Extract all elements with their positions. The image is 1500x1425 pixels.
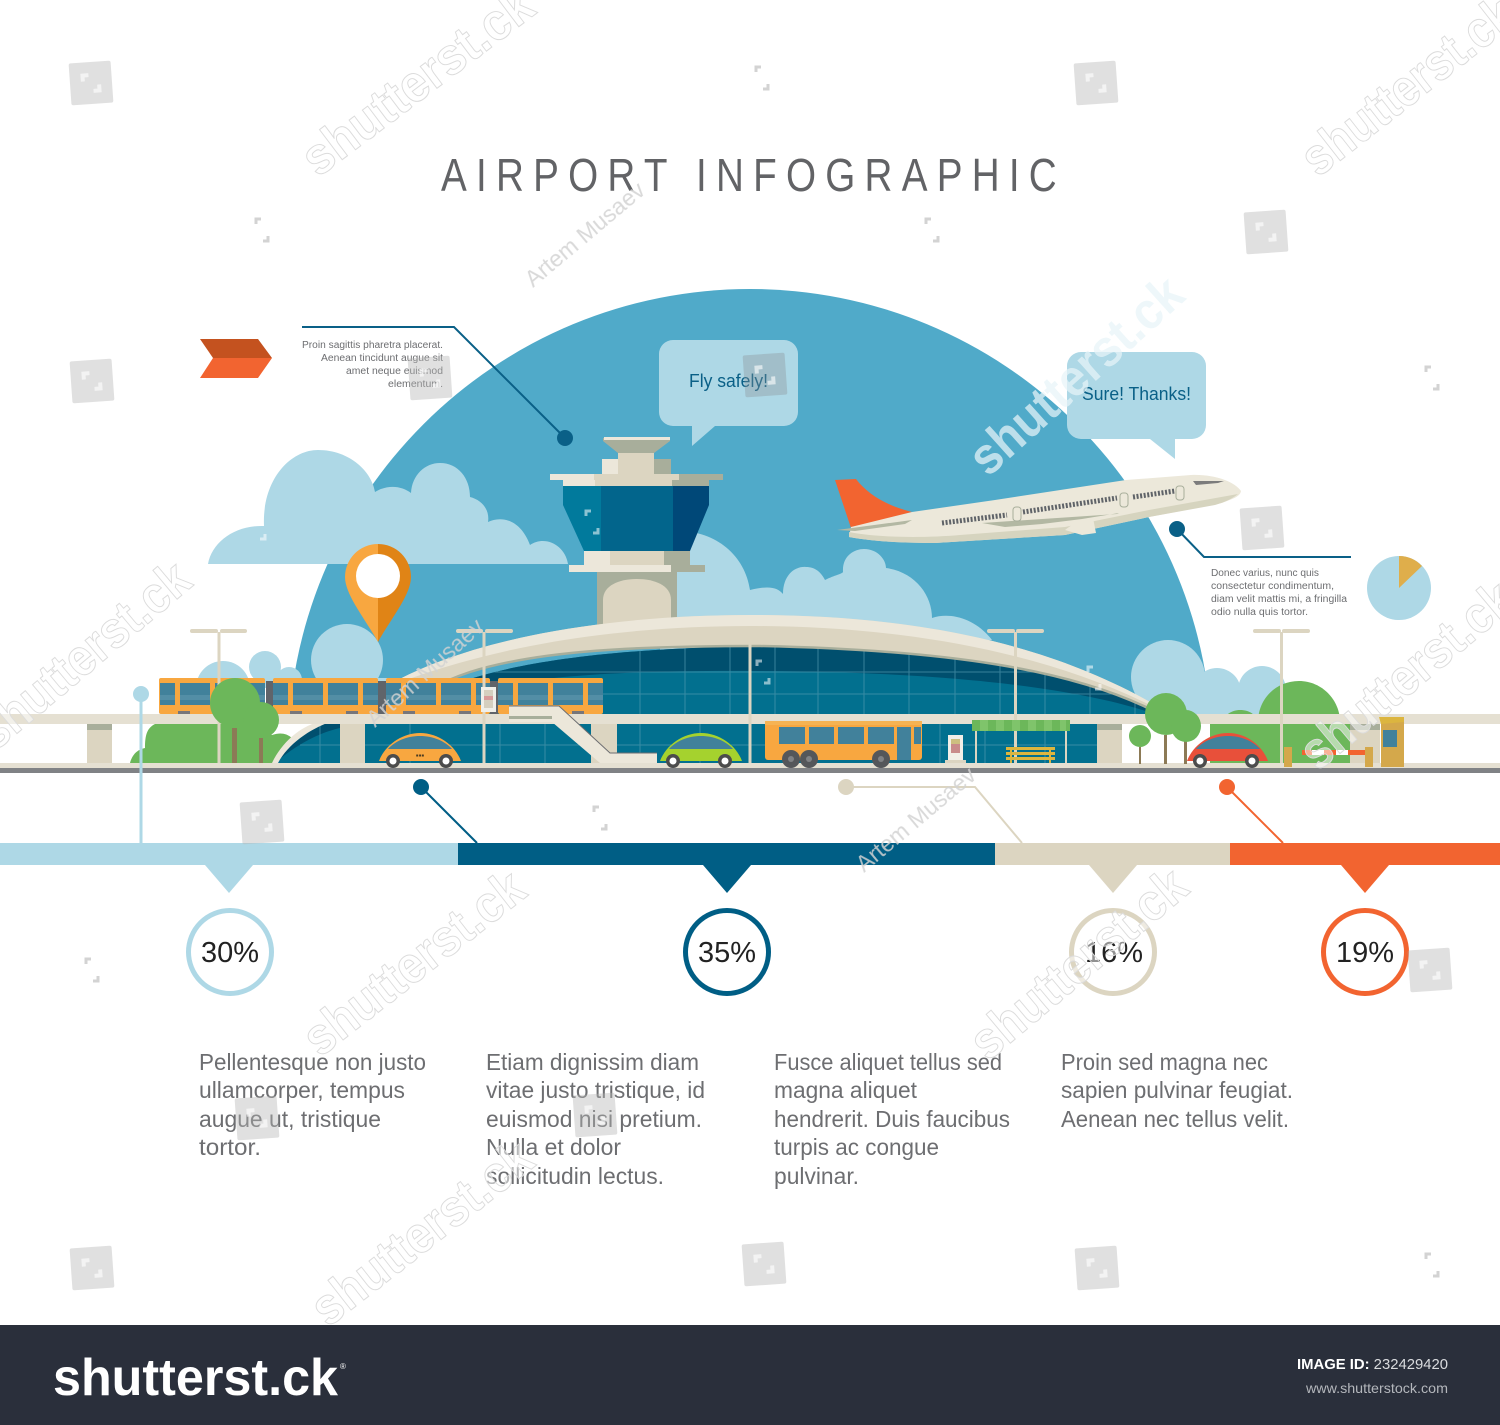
connector: beige: [838, 779, 1022, 843]
speech bubble: Fly safely: Fly safely!: [689, 371, 768, 391]
callout: right: diam velit mattis mi, a fringilla: [1211, 594, 1347, 605]
stat: 19%: [1324, 910, 1406, 994]
callout: right: consectetur condimentum,: [1211, 581, 1334, 592]
road: [0, 763, 1500, 773]
timetable kiosk on deck: [481, 687, 496, 712]
text block: column 1: tortor.: [199, 1134, 261, 1160]
cloud: low left group: [196, 624, 406, 715]
cloud: right group: [1131, 640, 1290, 720]
escalator: [509, 706, 657, 763]
callout: right: [1169, 521, 1351, 618]
red car: [1187, 733, 1268, 768]
title: AIRPORT INFOGRAPHIC: [441, 150, 1057, 201]
barrier and ticket booth: [1284, 717, 1404, 767]
text block: column 4: sapien pulvinar feugiat.: [1061, 1077, 1293, 1103]
pie chart: [1367, 556, 1431, 620]
callout: upper left: amet neque euismod: [346, 366, 443, 377]
cloud: upper left: [208, 450, 568, 564]
text block: column 1: Pellentesque non justo: [199, 1049, 426, 1075]
callout: upper left: [302, 327, 573, 446]
text block: column 1: [199, 1049, 426, 1160]
terminal roof: [380, 615, 1157, 716]
stat: 35%: 35%: [698, 937, 756, 969]
connector: orange: [1219, 779, 1283, 843]
left green bushes: [130, 724, 296, 763]
text block: column 4: Aenean nec tellus velit.: [1061, 1106, 1289, 1132]
footer bar: www.shutterstock.com: [1305, 1380, 1448, 1396]
taxi: [379, 733, 461, 768]
info kiosk: [945, 735, 966, 763]
watermark overlay: shutterst.ck: [957, 264, 1195, 487]
watermark overlay: shutterst.ck: [300, 1129, 544, 1337]
text block: column 3: [774, 1049, 1010, 1189]
watermark overlay: Artem Musaev: [851, 761, 981, 877]
text block: column 3: hendrerit. Duis faucibus: [774, 1106, 1010, 1132]
street lamps: [190, 629, 1310, 764]
airplane: [835, 475, 1241, 543]
terminal upper glass: [474, 647, 1146, 714]
callout: right: odio nulla quis tortor.: [1211, 607, 1308, 618]
stat: 35%: [686, 910, 768, 994]
speech bubble: Sure Thanks: [1067, 352, 1206, 459]
speech bubble: Sure Thanks: Sure! Thanks!: [1082, 384, 1191, 404]
green car: [660, 733, 742, 768]
watermark overlay: shutterst.ck: [292, 859, 536, 1067]
footer bar: ®: [340, 1362, 346, 1371]
callout: upper left: elementum.: [388, 379, 443, 390]
map pin: [345, 544, 411, 642]
orange chevron arrow: [200, 339, 272, 378]
trees right: [1129, 693, 1201, 764]
text block: column 2: sollicitudin lectus.: [486, 1163, 664, 1189]
text block: column 2: Etiam dignissim diam: [486, 1049, 699, 1075]
bus shelter and bench: [972, 720, 1070, 763]
watermark overlay: shutterst.ck: [958, 856, 1199, 1071]
elevated deck: [0, 714, 1500, 724]
text block: column 2: vitae justo tristique, id: [486, 1077, 705, 1103]
text block: column 2: euismod nisi pretium.: [486, 1106, 702, 1132]
footer bar: IMAGE ID: 232429420: [1297, 1356, 1448, 1373]
stat: 16%: [1072, 910, 1154, 994]
trees left: [210, 678, 279, 764]
footer bar: [0, 1325, 1500, 1425]
connector: dark blue: [413, 779, 477, 843]
footer bar: shutterst.ck: [53, 1349, 338, 1407]
text block: column 1: augue ut, tristique: [199, 1106, 381, 1132]
callout: right: Donec varius, nunc quis: [1211, 568, 1319, 579]
text block: column 3: magna aliquet: [774, 1077, 918, 1103]
connector: light blue: [133, 686, 149, 843]
terminal pillars: [87, 724, 1380, 763]
stat: 19%: 19%: [1336, 937, 1394, 969]
text block: column 4: [1061, 1049, 1293, 1132]
text block: column 3: turpis ac congue: [774, 1134, 939, 1160]
stat: 16%: 16%: [1085, 937, 1143, 969]
elevated train: [159, 678, 603, 714]
control tower: [550, 437, 723, 627]
text block: column 2: Nulla et dolor: [486, 1134, 621, 1160]
text block: column 1: ullamcorper, tempus: [199, 1077, 405, 1103]
callout: upper left: Proin sagittis pharetra placerat.: [302, 340, 443, 351]
watermark overlay: Artem Musaev: [361, 613, 489, 732]
callout: upper left: Aenean tincidunt augue sit: [321, 353, 443, 364]
bus: [765, 721, 922, 768]
speech bubble: Fly safely: [659, 340, 798, 446]
watermark overlay: Artem Musaev: [520, 176, 650, 292]
stat: 30%: [188, 910, 272, 994]
stat: 30%: 30%: [201, 937, 259, 969]
text block: column 3: Fusce aliquet tellus sed: [774, 1049, 1002, 1075]
taxi: ▪▪▪: [416, 751, 424, 760]
cloud: behind tower: [660, 531, 992, 650]
blue dome sky: [295, 289, 1205, 714]
segmented percentage bar: [0, 843, 1500, 893]
text block: column 2: [486, 1049, 705, 1189]
terminal lower glass: [272, 722, 1122, 763]
text block: column 3: pulvinar.: [774, 1163, 859, 1189]
right green hills: [1210, 681, 1378, 763]
text block: column 4: Proin sed magna nec: [1061, 1049, 1268, 1075]
